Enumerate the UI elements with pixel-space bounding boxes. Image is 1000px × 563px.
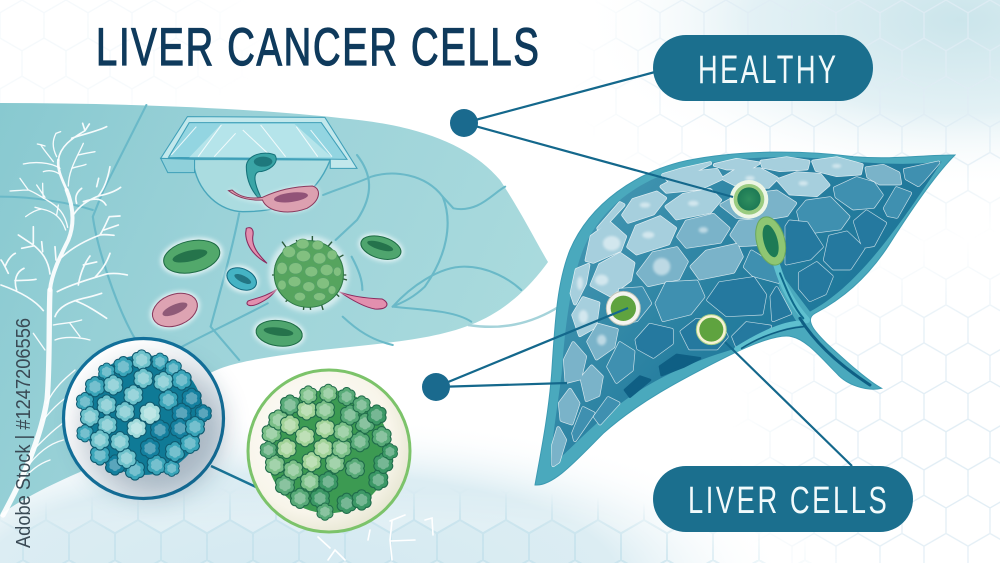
cell: green oval left (157, 232, 227, 281)
stock credit: Adobe Stock | #1247206556 (13, 318, 35, 548)
green marker: top (730, 180, 768, 219)
label: liver cells (653, 466, 913, 532)
panel: teal tissue band (0, 103, 560, 515)
liver cells (553, 158, 938, 465)
green marker: left (606, 291, 640, 325)
icon: white branching tree (1, 123, 127, 515)
panel: green cancer cell cluster (248, 370, 410, 532)
liver inner tissue (551, 157, 942, 467)
panel: liver diagram (535, 152, 955, 485)
cell: green oval right (355, 229, 407, 266)
title: LIVER CANCER CELLS (96, 17, 539, 76)
liver outer shape (535, 152, 955, 485)
decorative white twigs at bottom (318, 515, 433, 560)
lower left pale panel (0, 444, 800, 563)
callout lines (436, 72, 852, 466)
illustration: microscope slide and cells (144, 117, 407, 351)
liver vein (737, 265, 870, 385)
cell: teal droplet (246, 153, 276, 197)
tissue vessels (0, 105, 521, 360)
panel: teal cancer cell cluster (64, 338, 224, 498)
cell: small teal oval (220, 260, 263, 298)
cell: pink tendrils (246, 228, 387, 309)
icon: glass slide (161, 117, 357, 212)
cell nuclei highlights (577, 164, 841, 345)
callout dot: upper (450, 109, 478, 137)
label: healthy: HEALTHY (698, 48, 836, 92)
connector from band to liver (468, 306, 560, 327)
green marker: oval (751, 214, 791, 268)
line: connector between cluster circles (211, 466, 256, 487)
label: healthy (653, 35, 873, 101)
cell: spiky green cancer cell (269, 236, 349, 312)
cell: pink oval (144, 284, 206, 336)
cell: green oval bottom (252, 315, 307, 351)
cell: pink elongated cell (228, 186, 319, 212)
label: liver cells: LIVER CELLS (688, 480, 887, 522)
callout dot: lower (422, 373, 450, 401)
green marker: bottom (696, 315, 726, 345)
